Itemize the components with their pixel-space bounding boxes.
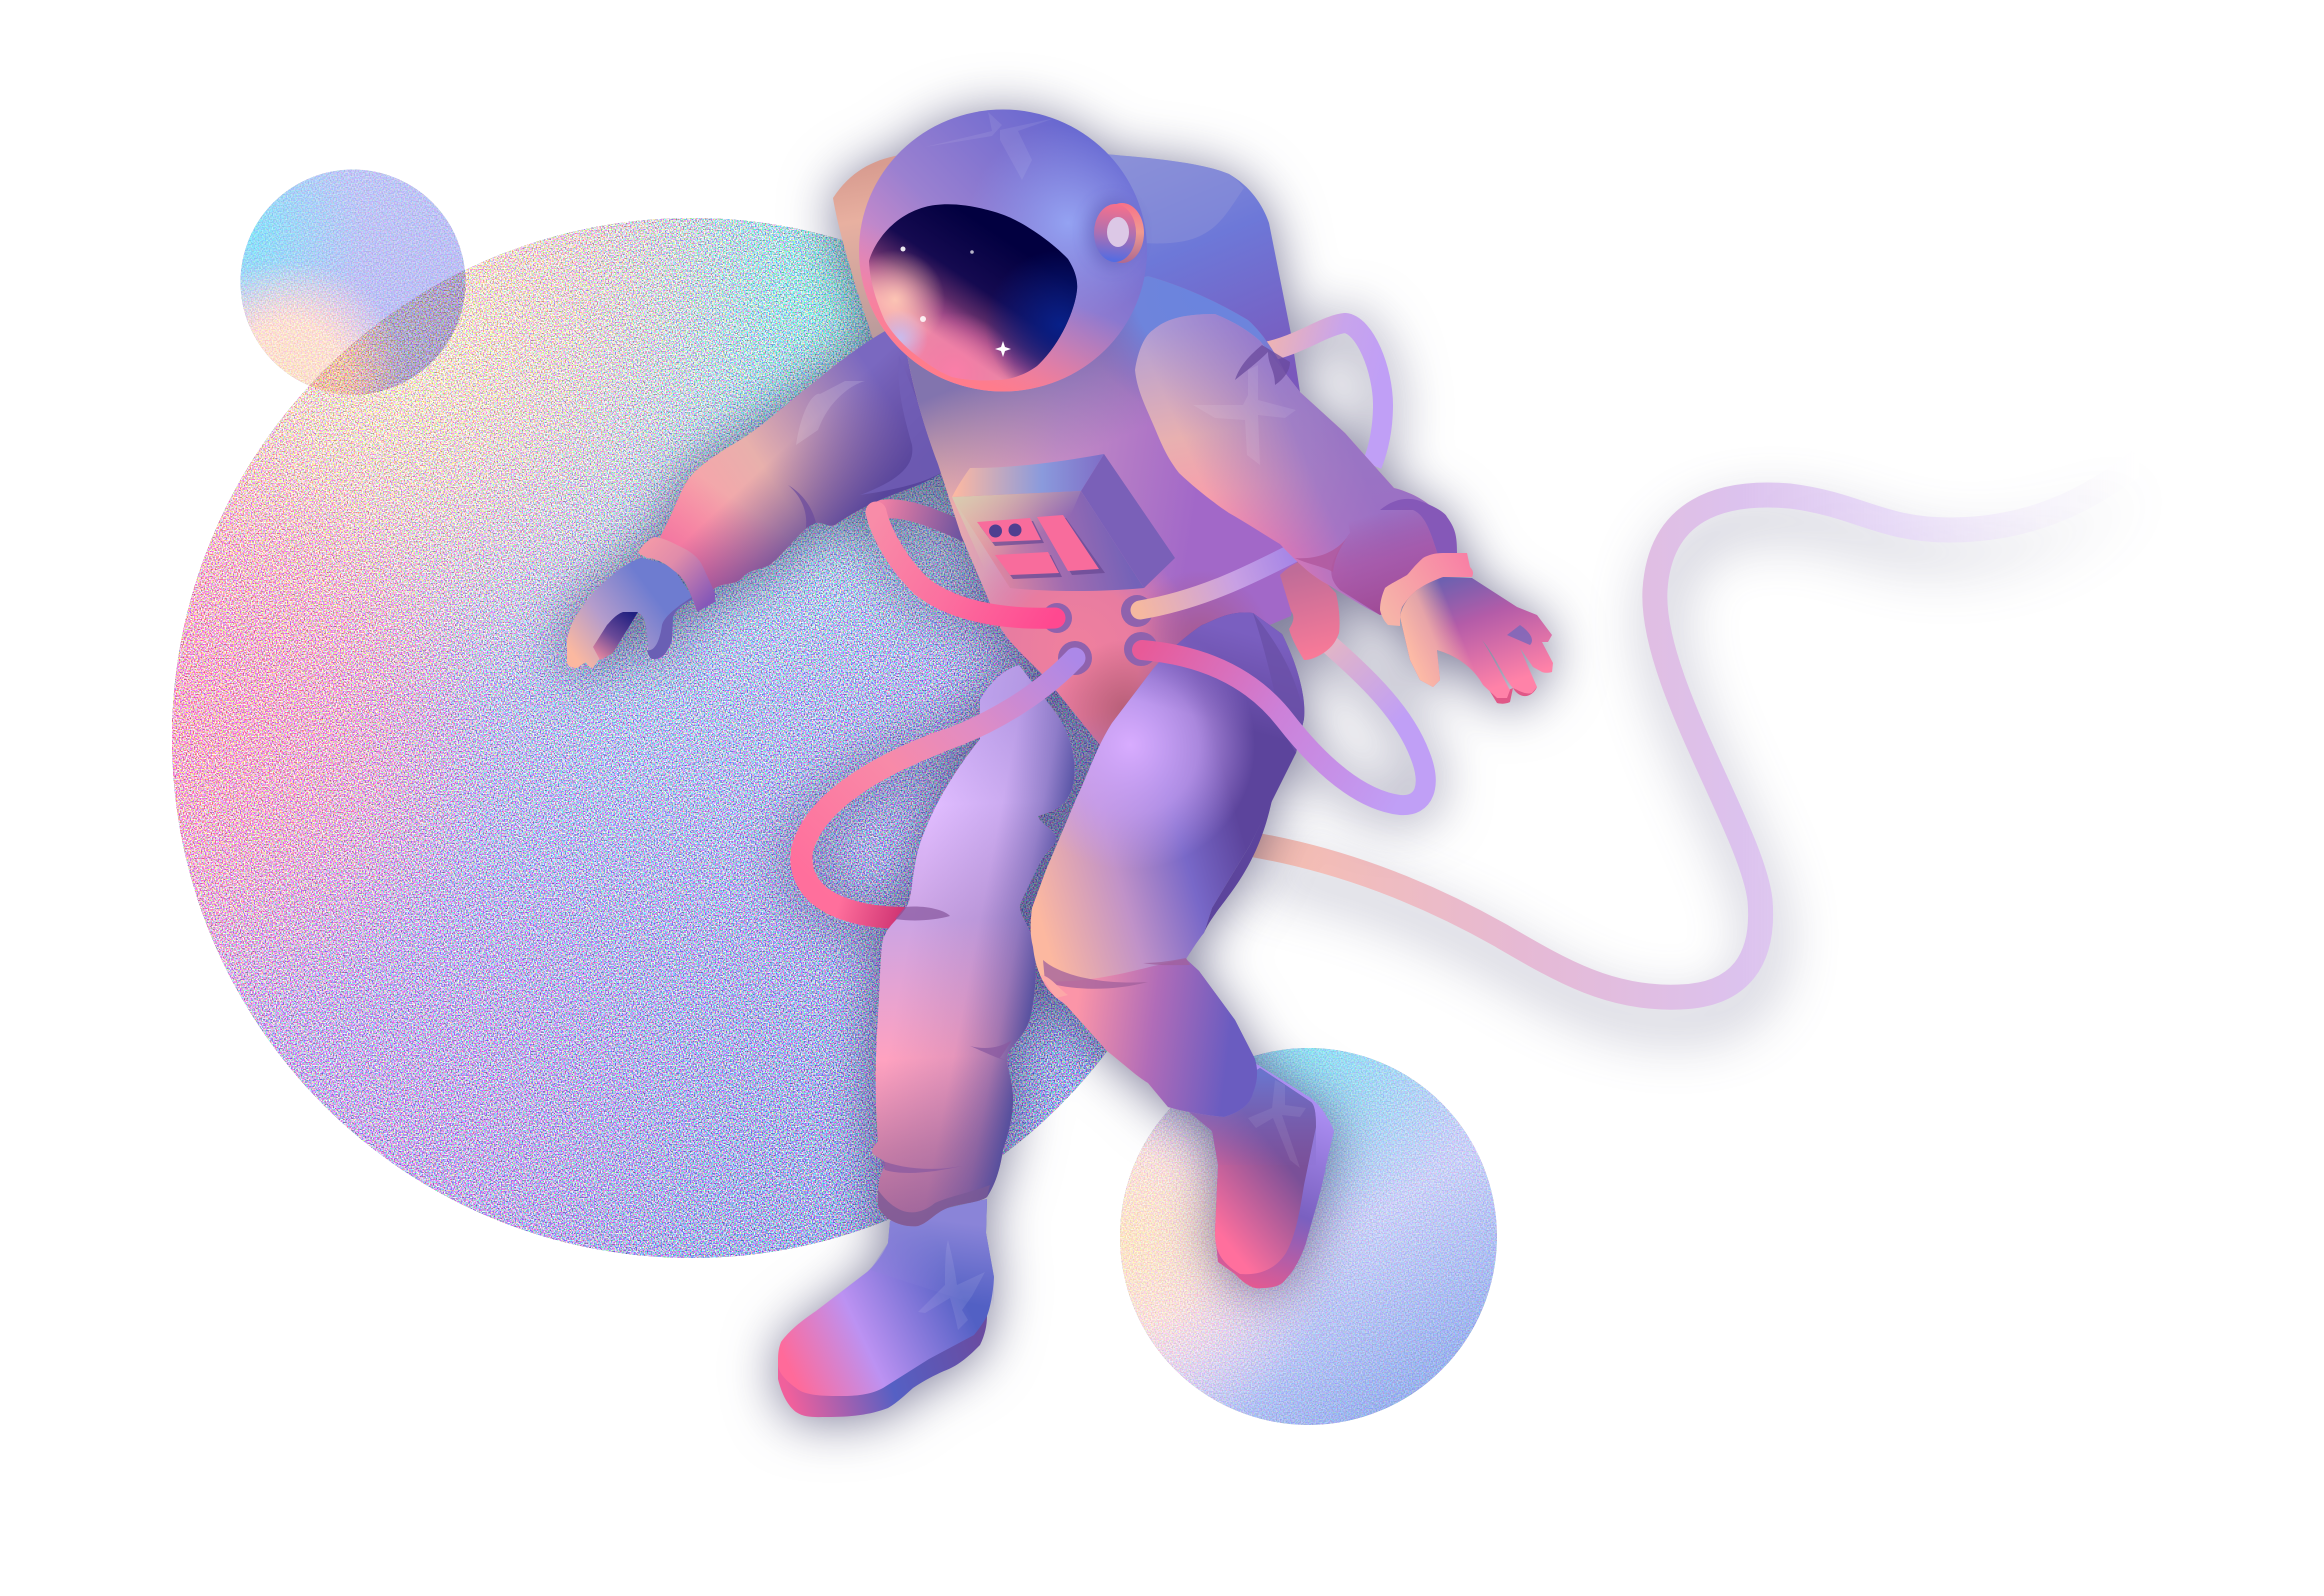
button panels	[977, 515, 1099, 575]
visor stars	[900, 246, 1011, 357]
right boot	[1189, 1063, 1334, 1288]
left glove	[567, 558, 692, 668]
planet: small circle top left	[240, 170, 466, 394]
astronaut figure	[567, 110, 1553, 1417]
left cuff	[638, 537, 715, 612]
hose: front right	[1142, 650, 1400, 805]
hose: pink chest loop	[876, 512, 1055, 618]
right cuff	[1380, 553, 1473, 626]
connector discs	[1042, 595, 1158, 675]
forearm	[1331, 470, 1438, 615]
tether cable	[1255, 460, 2140, 997]
backpack	[1090, 154, 1300, 392]
sleeve crease	[1295, 533, 1350, 572]
forearm outer band	[1380, 499, 1457, 555]
hose: left loop end	[830, 903, 905, 918]
planet: large grainy circle	[172, 218, 1212, 1258]
visor	[869, 204, 1078, 380]
ear piece	[1087, 199, 1144, 267]
right leg	[1031, 612, 1304, 1117]
torso	[905, 276, 1298, 750]
left arm	[660, 330, 945, 590]
hose: left loop front section	[940, 658, 1075, 742]
left leg	[872, 665, 1075, 1226]
hose: upper back loop	[1265, 323, 1383, 465]
button panel shadows	[980, 518, 1105, 579]
backpack left edge	[833, 155, 920, 345]
left boot	[778, 1199, 994, 1417]
hose: left loop back section	[801, 742, 940, 918]
hip pouch	[1280, 560, 1340, 660]
hose: chest loop top	[878, 509, 975, 537]
right arm	[1135, 314, 1457, 615]
chest control box	[952, 454, 1175, 591]
helmet decal	[925, 112, 1055, 180]
planet: circle bottom right	[1120, 1048, 1497, 1425]
hose: peach right	[1140, 553, 1293, 610]
hose: lower back loop	[1330, 645, 1426, 805]
round buttons	[989, 524, 1022, 538]
helmet	[859, 110, 1147, 392]
right hand	[1400, 577, 1553, 704]
